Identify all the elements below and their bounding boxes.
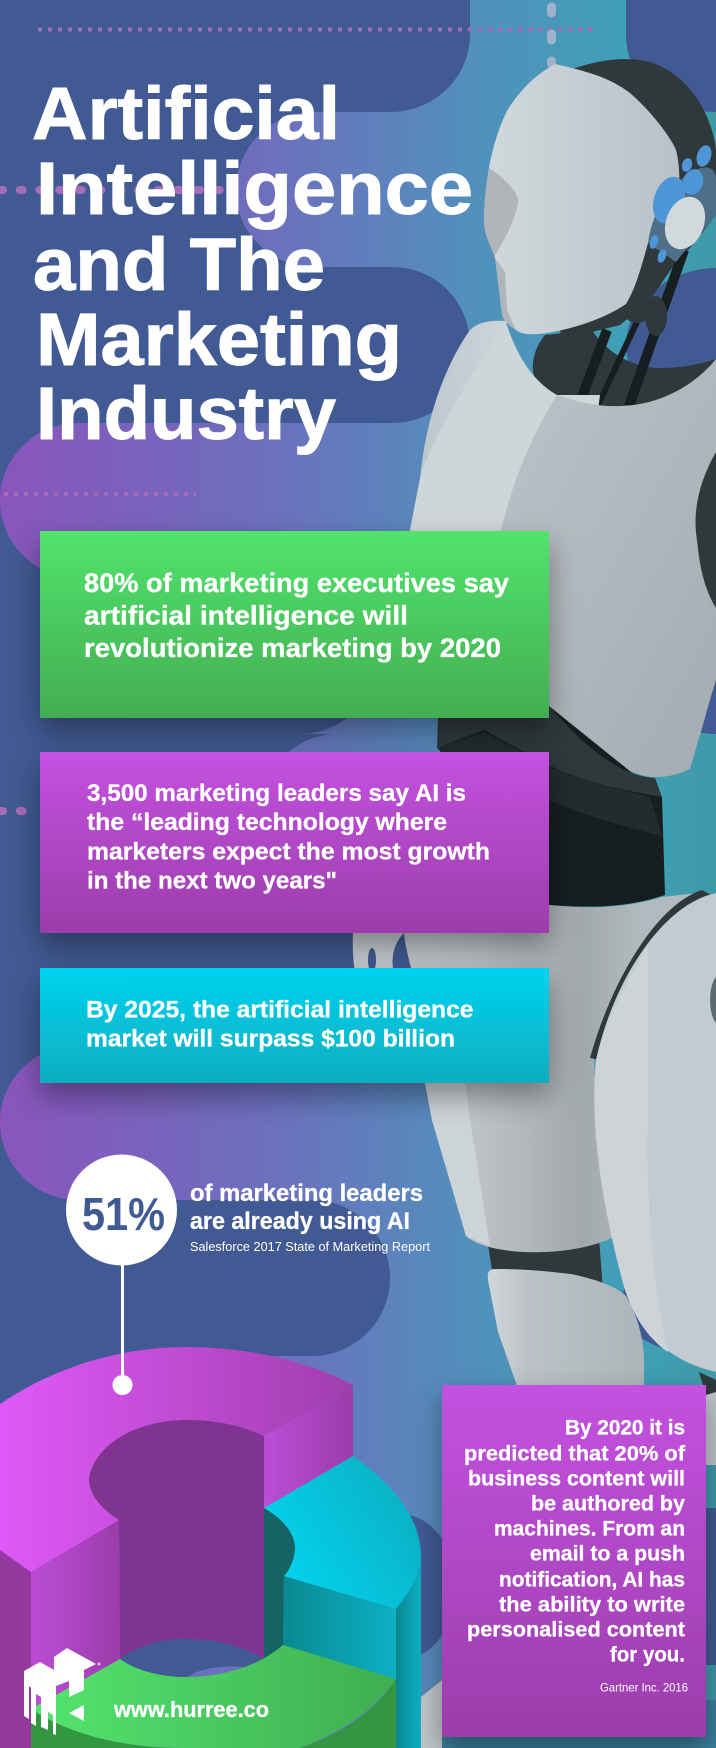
decorative dotted lines <box>0 0 598 811</box>
robot: neck collar <box>533 330 716 406</box>
panel: purple stat <box>40 752 549 933</box>
robot: shin <box>488 1269 644 1400</box>
logo <box>24 1648 269 1735</box>
title: and The <box>33 223 325 306</box>
robot: face shadow <box>484 168 518 330</box>
callout text: are already using AI <box>190 1208 410 1235</box>
purple stat text: marketers expect the most growth <box>87 838 490 866</box>
robot illustration <box>353 59 716 1748</box>
robot: right arm dark <box>696 452 716 608</box>
robot: torso light <box>409 325 600 700</box>
prediction text: business content will <box>468 1466 685 1490</box>
chart: lighter hole patch <box>187 1666 256 1677</box>
robot: right thigh outline <box>590 890 716 1060</box>
cyan stat text <box>86 996 474 1052</box>
chart: green lower face <box>31 1679 396 1748</box>
title: Artificial <box>32 72 340 155</box>
chart: purple inner wall <box>89 1420 264 1659</box>
robot: torso shaded <box>480 359 716 777</box>
prediction text: personalised content <box>467 1618 685 1642</box>
purple stat text: 3,500 marketing leaders say AI is <box>87 780 466 807</box>
cyan stat text: market will surpass $100 billion <box>86 1026 455 1052</box>
chart: purple front face <box>31 1520 120 1715</box>
chart: purple top face <box>0 1347 353 1572</box>
title <box>32 72 473 455</box>
robot: face <box>484 64 679 334</box>
51 percent value: 51% <box>82 1188 165 1240</box>
purple stat text: in the next two years" <box>87 868 337 894</box>
callout source: Salesforce 2017 State of Marketing Report <box>190 1239 430 1254</box>
robot: hips and left thigh <box>353 893 699 1252</box>
purple stat text: the “leading technology where <box>87 809 447 836</box>
prediction source: Gartner Inc. 2016 <box>600 1680 688 1694</box>
prediction text: machines. From an <box>494 1516 685 1540</box>
connector line <box>121 1262 124 1382</box>
prediction text: for you. <box>610 1642 685 1666</box>
green stat text <box>84 568 509 663</box>
panel: green stat <box>40 531 549 718</box>
green stat text: 80% of marketing executives say <box>84 568 509 598</box>
prediction text: the ability to write <box>499 1592 685 1616</box>
icon: arrow marker <box>69 1705 84 1721</box>
green stat text: revolutionize marketing by 2020 <box>84 633 501 663</box>
circle badge <box>66 1154 177 1266</box>
robot: glowing sensors <box>647 143 716 264</box>
robot: right thigh highlight <box>594 945 668 1352</box>
chart: cyan top face <box>264 1456 421 1609</box>
title: Industry <box>36 372 336 455</box>
panel: prediction <box>442 1385 706 1737</box>
robot: knee joint <box>485 1225 603 1290</box>
robot: neck cables <box>580 250 684 406</box>
prediction text: notification, AI has <box>499 1568 685 1592</box>
chart: green top face <box>31 1645 396 1748</box>
prediction text: email to a push <box>530 1542 685 1566</box>
callout text: of marketing leaders <box>190 1180 423 1207</box>
robot: hand details <box>368 933 411 972</box>
chart: cyan front face <box>283 1576 396 1685</box>
robot: dark thigh mark <box>710 973 716 1027</box>
logo mark <box>24 1648 96 1735</box>
chart: teal inner wall <box>264 1508 295 1659</box>
website address: www.hurree.co <box>113 1697 269 1722</box>
panel: cyan stat <box>40 968 549 1083</box>
title: Intelligence <box>36 147 473 230</box>
3D ring chart <box>0 1347 421 1748</box>
robot: shoulder <box>420 321 507 520</box>
callout text <box>190 1180 423 1235</box>
robot: waist <box>437 706 665 907</box>
connector dot <box>112 1375 132 1395</box>
title: Marketing <box>36 298 402 381</box>
chart: purple right face <box>264 1385 353 1508</box>
prediction text: be authored by <box>531 1492 685 1516</box>
prediction text <box>464 1416 686 1666</box>
cyan stat text: By 2025, the artificial intelligence <box>86 996 474 1024</box>
robot: back of the head <box>560 59 716 340</box>
prediction text: predicted that 20% of <box>464 1442 686 1466</box>
robot: lower leg pieces <box>421 1372 716 1748</box>
green stat text: artificial intelligence will <box>84 600 408 630</box>
chart: hole through ring <box>120 1639 283 1695</box>
robot: right thigh <box>594 893 716 1372</box>
callout: 51 percent <box>66 1154 430 1395</box>
chart: purple outer wall <box>0 1550 31 1748</box>
chart: cyan outer wall <box>396 1556 421 1748</box>
robot: left thigh highlight <box>418 1000 490 1246</box>
purple stat text <box>87 780 490 894</box>
logo registered mark <box>98 1662 100 1666</box>
prediction text: By 2020 it is <box>565 1416 685 1440</box>
